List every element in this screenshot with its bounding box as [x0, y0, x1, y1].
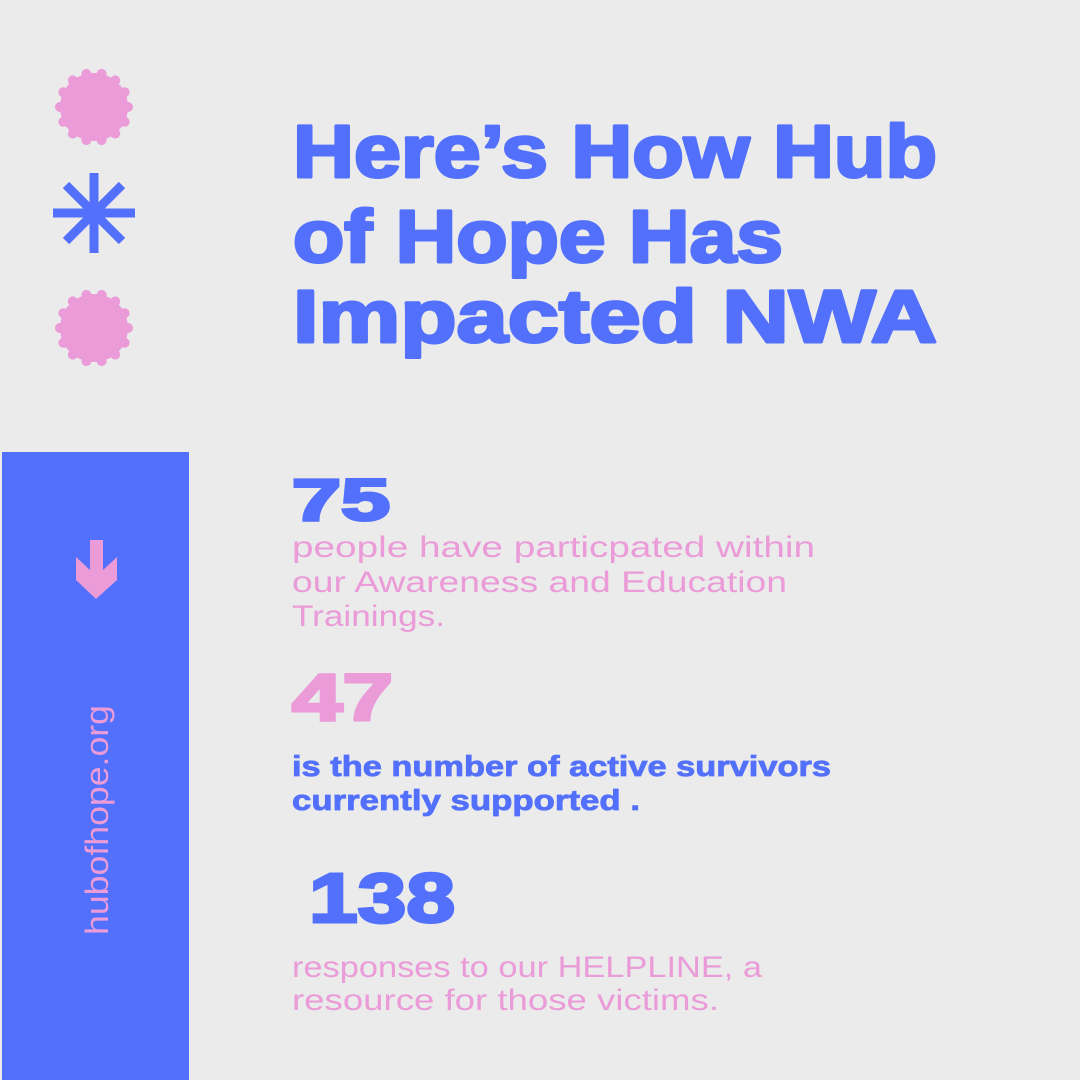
icon: top pink scallop — [55, 69, 133, 145]
title: of Hope Has — [293, 195, 783, 278]
icon: blue asterisk — [53, 173, 135, 253]
stat 3: resource for those victims. — [292, 984, 719, 1017]
panel: blue side bar — [2, 452, 189, 1080]
stat 1: 75 — [292, 468, 390, 533]
title: Impacted NWA — [293, 275, 937, 358]
stat 2: is the number of active survivors — [292, 751, 831, 783]
stat 1: people have particpated within — [292, 531, 815, 564]
stat 3: 138 — [309, 859, 455, 937]
icon: down arrow — [76, 540, 117, 599]
stat 3 — [292, 859, 762, 1017]
title: Here’s How Hub — [293, 110, 937, 193]
stat 3: responses to our HELPLINE, a — [292, 951, 762, 984]
title — [293, 110, 937, 358]
stat 2 — [292, 660, 831, 817]
website text: hubofhope.org — [79, 705, 115, 935]
stat 2: 47 — [292, 660, 393, 734]
stat 1: our Awareness and Education — [292, 566, 787, 599]
stat 1: Trainings. — [292, 600, 445, 633]
icon: bottom pink scallop — [55, 290, 133, 366]
stat 1 — [292, 468, 815, 633]
stat 2: currently supported . — [292, 785, 640, 817]
